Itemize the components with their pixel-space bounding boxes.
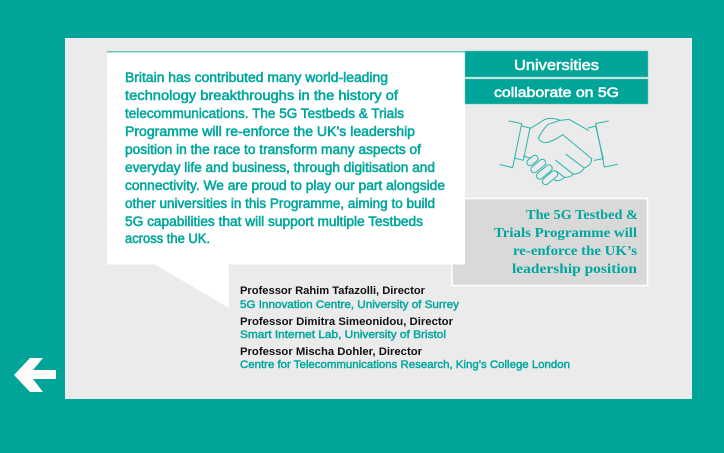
- heading bar: Universities: Universities: [514, 57, 599, 74]
- attribution: Professor Dimitra Simeonidou: [240, 316, 454, 341]
- speech bubble with main quote: connectivity. We are proud to play our part alongside: [125, 178, 445, 193]
- speech bubble with main quote: [107, 51, 465, 308]
- attribution: Professor Rahim Tafazolli: 5G Innovation Centre, University of Surrey: [240, 299, 460, 311]
- speech bubble with main quote: Programme will re-enforce the UK’s leadership: [125, 124, 415, 139]
- attribution: Professor Dimitra Simeonidou: Smart Internet Lab, University of Bristol: [240, 329, 446, 341]
- speech bubble with main quote: other universities in this Programme, aiming to build: [125, 196, 435, 211]
- speech bubble with main quote: 5G capabilities that will support multiple Testbeds: [125, 214, 423, 229]
- arrow: back: [14, 358, 56, 392]
- attribution: Professor Rahim Tafazolli: [240, 285, 460, 311]
- speech bubble with main quote: across the UK.: [125, 231, 210, 246]
- callout: grey pull quote: Trials Programme will: [494, 226, 637, 241]
- callout: grey pull quote: re-enforce the UK’s: [513, 244, 638, 259]
- attribution: Professor Dimitra Simeonidou: Professor Dimitra Simeonidou, Director: [240, 316, 454, 328]
- attribution: Professor Mischa Dohler: Centre for Telecommunications Research, King’s College London: [240, 359, 570, 371]
- icon: handshake: [500, 118, 618, 186]
- attribution: Professor Mischa Dohler: [240, 346, 570, 371]
- speech bubble with main quote: technology breakthroughs in the history of: [125, 88, 398, 103]
- attribution: Professor Mischa Dohler: Professor Mischa Dohler, Director: [240, 346, 423, 358]
- callout: grey pull quote: The 5G Testbed &: [526, 208, 638, 223]
- speech bubble with main quote: everyday life and business, through digitisation and: [125, 160, 435, 175]
- heading bar: collaborate on 5G: collaborate on 5G: [494, 84, 619, 100]
- callout: grey pull quote: [452, 198, 648, 286]
- speech bubble with main quote: telecommunications. The 5G Testbeds & Trials: [125, 106, 404, 121]
- attribution: Professor Rahim Tafazolli: Professor Rahim Tafazolli, Director: [240, 285, 426, 297]
- heading bar: collaborate on 5G: [465, 79, 648, 104]
- callout: grey pull quote: leadership position: [512, 262, 637, 277]
- background panel: [65, 38, 692, 399]
- speech bubble with main quote: position in the race to transform many aspects of: [125, 142, 421, 157]
- speech bubble with main quote: Britain has contributed many world-leading: [125, 70, 388, 85]
- heading bar: Universities: [465, 51, 648, 77]
